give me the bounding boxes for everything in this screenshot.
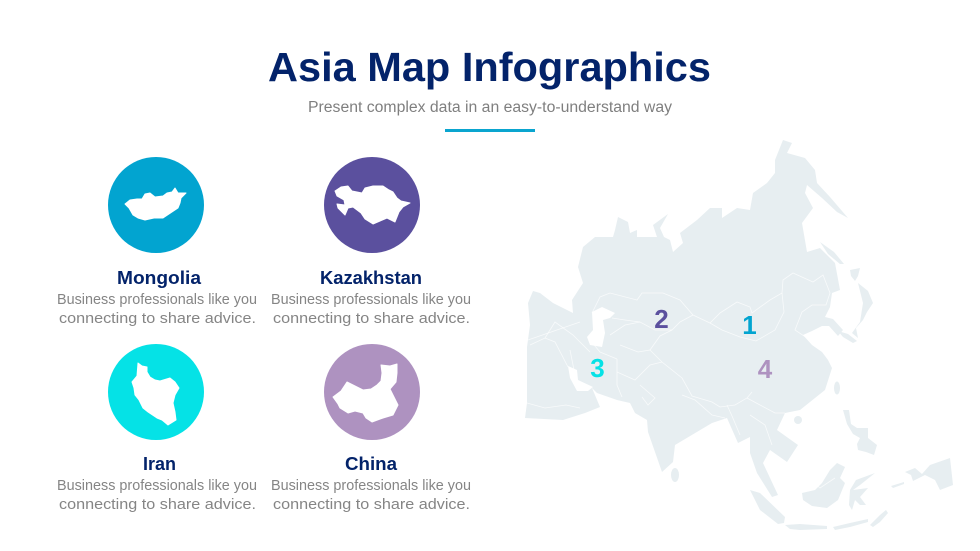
island: Taiwan <box>834 382 840 394</box>
Persian Gulf <box>568 366 593 391</box>
title accent underline <box>445 129 535 132</box>
panel: Kazakhstan <box>271 157 471 327</box>
text: China description <box>271 478 471 513</box>
island: Hokkaido <box>850 268 860 281</box>
island: Hainan <box>794 416 802 424</box>
map marker 3: 3 <box>590 353 605 383</box>
island: Sakhalin <box>820 242 844 264</box>
map marker 4: 4 <box>758 354 773 384</box>
islands: Lesser Sunda <box>833 519 868 530</box>
heading: Iran: Iran <box>143 454 176 474</box>
island: Sri Lanka <box>671 468 679 482</box>
heading: China: China <box>345 454 398 474</box>
panel: Iran <box>57 344 257 513</box>
Caspian Sea <box>587 307 615 347</box>
text: Iran description: connecting to share advice. <box>59 497 256 513</box>
text: Kazakhstan description: Business professionals like you <box>271 292 471 308</box>
island: Sumatra <box>750 490 785 524</box>
text: Mongolia description <box>57 292 257 327</box>
heading: Kazakhstan: Kazakhstan <box>320 268 422 288</box>
island: Borneo <box>802 463 845 508</box>
island: Sulawesi <box>849 473 875 510</box>
icon: Mongolia badge <box>108 157 204 253</box>
icon: Kazakhstan badge <box>324 157 420 253</box>
islands: Philippines <box>843 410 877 455</box>
text: Mongolia description: connecting to share advice. <box>59 311 256 327</box>
text: Iran description: Business professionals like you <box>57 478 257 494</box>
title: Asia Map Infographics <box>268 44 711 90</box>
text: Mongolia description: Business professionals like you <box>57 292 257 308</box>
map marker 1: 1 <box>742 310 757 340</box>
map marker 2: 2 <box>654 304 669 334</box>
text: China description: Business professionals like you <box>271 478 471 494</box>
text: China description: connecting to share advice. <box>273 497 470 513</box>
subtitle: Present complex data in an easy-to-understand way <box>308 99 672 116</box>
icon: China badge <box>324 344 420 440</box>
island: Java <box>785 524 827 530</box>
panel: Mongolia <box>57 157 257 327</box>
map: Asia <box>525 140 953 530</box>
country borders <box>527 273 835 488</box>
icon: Iran badge <box>108 344 204 440</box>
text: Iran description <box>57 478 257 513</box>
island: Kyushu <box>838 331 857 343</box>
island: Honshu <box>852 283 873 338</box>
island: New Guinea <box>905 458 953 490</box>
text: Kazakhstan description <box>271 292 471 327</box>
panel: China <box>271 344 471 513</box>
text: Kazakhstan description: connecting to share advice. <box>273 311 470 327</box>
heading: Mongolia: Mongolia <box>117 268 202 288</box>
